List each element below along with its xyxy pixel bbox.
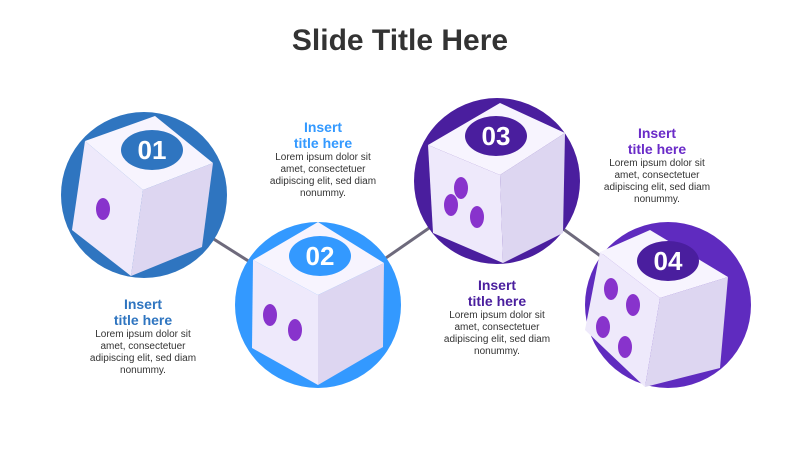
text 02: Lorem ipsum dolor sit amet, consectetuer adipiscing elit, sed diam nonummy. xyxy=(270,152,376,199)
text 04: title here xyxy=(628,141,686,157)
text 04: Lorem ipsum dolor sit amet, consectetuer adipiscing elit, sed diam nonummy. xyxy=(604,158,710,205)
text 03: Lorem ipsum dolor sit amet, consectetuer adipiscing elit, sed diam nonummy. xyxy=(444,310,550,357)
text 01: Insert xyxy=(124,296,162,312)
die 01 xyxy=(61,112,227,278)
text 01: Lorem ipsum dolor sit amet, consectetuer adipiscing elit, sed diam nonummy. xyxy=(90,329,196,376)
text 03: Insert xyxy=(478,277,516,293)
die 03: 03 xyxy=(482,121,510,151)
connectors xyxy=(144,181,668,305)
die 04: 04 xyxy=(654,246,683,276)
title: Slide Title Here xyxy=(292,24,508,57)
text 04 xyxy=(604,125,710,205)
text 03 xyxy=(444,277,550,357)
text 01 xyxy=(90,296,196,376)
die 04 xyxy=(585,222,751,388)
text 03: title here xyxy=(468,293,526,309)
text 01: title here xyxy=(114,312,172,328)
die 02: 02 xyxy=(306,241,334,271)
die 02 xyxy=(235,222,401,388)
text 04: Insert xyxy=(638,125,676,141)
die 01: 01 xyxy=(138,135,166,165)
text 02: Insert xyxy=(304,119,342,135)
die 03 xyxy=(414,98,580,264)
text 02 xyxy=(270,119,376,199)
text 02: title here xyxy=(294,135,352,151)
